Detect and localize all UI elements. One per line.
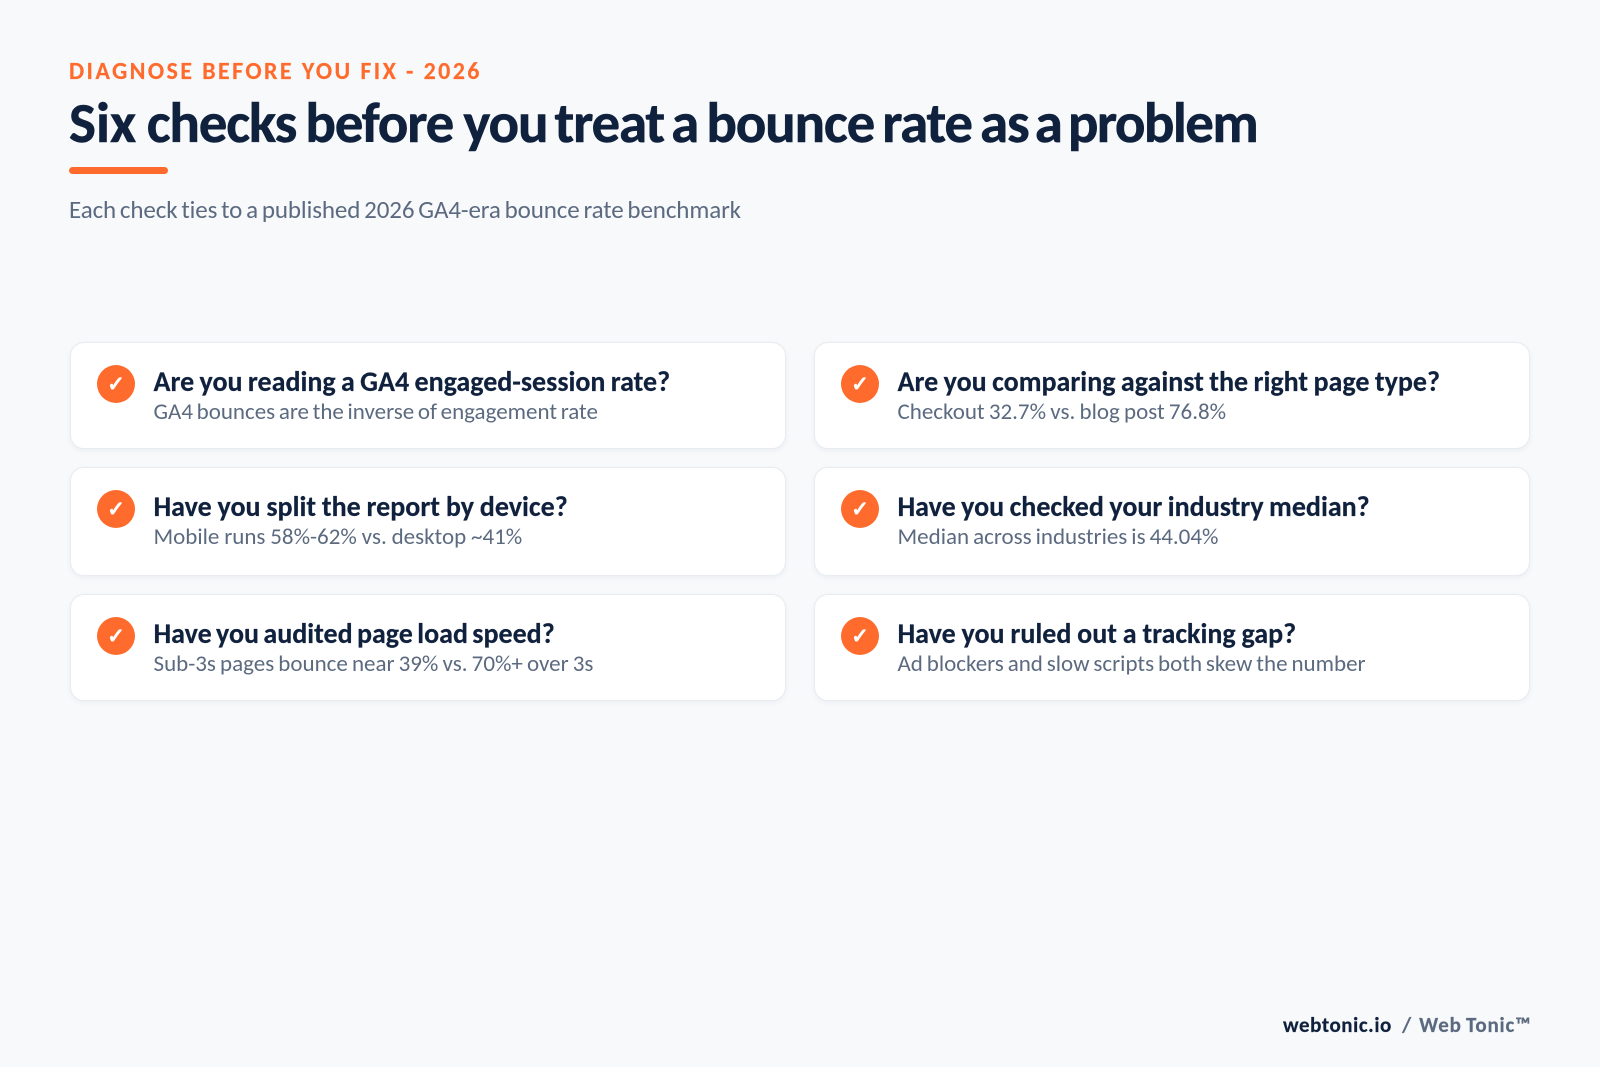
icon: check: ✓ [107, 624, 125, 648]
question: Are you reading a GA4 engaged-session rate? [154, 364, 670, 399]
question: Have you checked your industry median? [898, 489, 1370, 524]
question: Have you ruled out a tracking gap? [898, 616, 1296, 651]
accent bar [69, 167, 168, 174]
icon: check [841, 490, 879, 528]
card: device split [70, 467, 786, 576]
detail: Sub-3s pages bounce near 39% vs. 70%+ over 3s [154, 650, 593, 678]
icon: check: ✓ [107, 497, 125, 521]
detail: Ad blockers and slow scripts both skew the number [898, 650, 1366, 678]
icon: check: ✓ [851, 372, 869, 396]
icon: check [97, 365, 135, 403]
title: Six checks before you treat a bounce rate as a problem [69, 89, 1257, 158]
detail: Checkout 32.7% vs. blog post 76.8% [898, 398, 1226, 426]
card: page type [814, 342, 1530, 449]
detail: GA4 bounces are the inverse of engagement rate [154, 398, 598, 426]
question: Are you comparing against the right page type? [898, 364, 1440, 399]
card: GA4 engaged-session rate [70, 342, 786, 449]
subtitle: Each check ties to a published 2026 GA4-era bounce rate benchmark [69, 194, 741, 225]
icon: check [97, 490, 135, 528]
card: industry median [814, 467, 1530, 576]
icon: check [841, 617, 879, 655]
icon: check: ✓ [851, 497, 869, 521]
icon: check: ✓ [851, 624, 869, 648]
icon: check [97, 617, 135, 655]
card: page load speed [70, 594, 786, 701]
detail: Median across industries is 44.04% [898, 523, 1218, 551]
icon: check [841, 365, 879, 403]
detail: Mobile runs 58%-62% vs. desktop ~41% [154, 523, 522, 551]
question: Have you split the report by device? [154, 489, 568, 524]
icon: check: ✓ [107, 372, 125, 396]
question: Have you audited page load speed? [154, 616, 555, 651]
footer brand: webtonic.io / Web Tonic™ [1283, 1012, 1531, 1038]
eyebrow: DIAGNOSE BEFORE YOU FIX - 2026 [69, 57, 482, 86]
card: tracking gap [814, 594, 1530, 701]
